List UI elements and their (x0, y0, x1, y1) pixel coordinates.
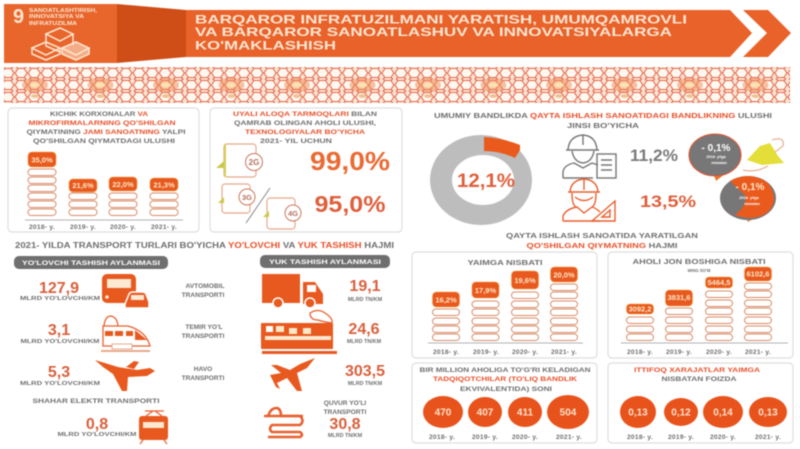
panel: share of GDP (412, 252, 597, 358)
capsule bar chart: 2019- y. (473, 349, 499, 356)
bubble chart: 504 (560, 408, 577, 418)
ornamental band (4, 67, 790, 103)
bubble chart: 0,12 (671, 408, 691, 418)
heading: UMUMIY BANDLIKDA QAYTA ISHLASH SANOATIDAGI BANDLIKNING ULUSHI (434, 111, 772, 120)
stat: 95,0%: 95,0% (314, 191, 386, 217)
heading (434, 111, 772, 130)
capsule bar chart: 3831,6 (668, 293, 690, 302)
bubble chart: 2020- y. (512, 434, 538, 441)
capsule bar chart: 2018- y. (29, 224, 55, 231)
capsule bar chart: 5464,5 (708, 278, 730, 287)
stat: rail freight: 24,6 (348, 321, 380, 338)
panel: mobile coverage (210, 108, 402, 232)
title: BARQAROR INFRATUZILMANI YARATISH, UMUMQAMROVLI (195, 14, 687, 26)
callout: male change: - 0,1% (702, 143, 731, 154)
icon: airplane (95, 360, 155, 391)
stat: air passengers: MLRD YO'LOVCHI/KM (20, 381, 101, 387)
goal 9 square: INNOVATSIYA VA (29, 14, 84, 20)
icon: 4G phone: 4G (288, 209, 298, 218)
capsule bar chart: 2019- y. (666, 349, 692, 356)
stat: rail passengers: 3,1 (48, 322, 70, 339)
panel heading (26, 111, 186, 145)
donut chart (430, 135, 532, 225)
stat: pipeline: 30,8 (329, 416, 361, 433)
callout: female change (720, 176, 776, 222)
capsule bar chart: 22,0% (112, 180, 134, 189)
heading: manufacturing value added (506, 231, 698, 250)
stat: air passengers (20, 364, 101, 387)
capsule bar chart: 2021- y. (151, 224, 177, 231)
capsule bar chart: 2020- y. (706, 349, 732, 356)
icon: high-speed train (101, 316, 150, 352)
stat: rail freight: MLRD TN/KM (347, 339, 382, 345)
panel heading: BIR MILLION AHOLIGA TO'G'RI KELADIGAN (420, 367, 591, 374)
stat: pipeline: MLRD TN/KM (328, 433, 363, 439)
unit label: MING SO'M (688, 268, 711, 273)
heading: JINSI BO'YICHA (567, 121, 640, 130)
icon: 3G phone: 3G (242, 193, 252, 202)
icon: cubes (32, 28, 89, 60)
bubble chart: 0,13 (628, 408, 648, 418)
icon: cargo plane (270, 358, 315, 391)
chevron arrow (743, 10, 791, 57)
icon: 3G phone (218, 184, 255, 213)
capsule bar chart (25, 152, 183, 231)
stat: female share: 13,5% (640, 192, 696, 211)
panel heading: NISBATAN FOIZDA (662, 376, 737, 383)
capsule bar chart (428, 267, 583, 356)
icon: pipeline (264, 408, 303, 437)
divider slash (246, 188, 270, 223)
stat: bus passengers: 127,9 (39, 280, 79, 297)
label: rail transport (182, 324, 225, 340)
bubble chart: 411 (517, 408, 534, 418)
callout: female change: - 0,1% (736, 182, 765, 193)
panel heading: 2021- YIL UCHUN (260, 138, 333, 145)
goal 9 square: INFRATUZILMA (29, 21, 77, 27)
label: pipeline transport: QUVUR YO'LI (324, 400, 366, 407)
callout: male change: nisbatan (711, 161, 727, 165)
passenger pill: YO'LOVCHI TASHISH AYLANMASI (22, 260, 160, 267)
stat: air freight: 303,5 (345, 363, 385, 380)
callout: male change: 2018- yilga (706, 155, 727, 159)
stat: urban electric (58, 416, 137, 438)
bubble chart: 2019- y. (668, 434, 694, 441)
panel heading: KICHIK KORXONALAR VA (50, 111, 148, 118)
stat: road freight (348, 278, 383, 303)
stat: rail freight (347, 321, 382, 345)
label: rail transport: TEMIR YO'L (185, 324, 223, 331)
icon: 2G phone (216, 144, 262, 177)
label: road transport: AVTOMOBIL (186, 283, 224, 290)
freight pill: YUK TASHISH AYLANMASI (269, 259, 381, 266)
capsule bar chart: 2020- y. (512, 349, 538, 356)
label: road transport: TRANSPORTI (182, 292, 225, 299)
panel: employment share (430, 111, 784, 225)
bubble chart (423, 395, 589, 441)
capsule bar chart: 2020- y. (110, 224, 136, 231)
capsule bar chart: 2018- y. (627, 349, 653, 356)
panel heading: EKVIVALENTIDA) SONI (460, 386, 552, 393)
capsule bar chart: 3092,2 (629, 304, 651, 314)
banner fold (117, 4, 186, 63)
panel heading: QAMRAB OLINGAN AHOLI ULUSHI, (234, 120, 376, 127)
stat: bus passengers: MLRD YO'LOVCHI/KM (20, 296, 101, 302)
callout: female change: 2018- yilga (739, 196, 760, 200)
bubble chart: 0,14 (713, 408, 733, 418)
stat: air passengers: 5,3 (48, 364, 70, 381)
capsule bar chart: 2021- y. (551, 349, 577, 356)
callout: female change: nisbatan (744, 202, 760, 206)
callout: male change (689, 134, 741, 181)
panel heading: AHOLI JON BOSHIGA NISBATI (632, 259, 766, 266)
panel heading: TADQIQOTCHILAR (TO'LIQ BANDLIK (433, 376, 577, 383)
title (195, 14, 687, 52)
bubble chart: 2018- y. (627, 434, 653, 441)
label: urban electric transport: SHAHAR ELEKTR TRANSPORTI (32, 398, 160, 405)
capsule bar chart (621, 267, 788, 356)
stat: bus passengers (20, 280, 101, 302)
capsule bar chart: 21,3% (153, 180, 175, 190)
label: air transport: TRANSPORTI (182, 375, 225, 382)
panel heading: YAIMGA NISBATI (468, 260, 543, 267)
goal number: 9 (13, 6, 24, 28)
panel heading (420, 367, 591, 393)
panel heading: ITTIFOQ XARAJATLAR YAIMGA (634, 367, 760, 374)
stat: rail passengers: MLRD YO'LOVCHI/KM (20, 339, 100, 345)
title: VA BARQAROR SANOATLASHUV VA INNOVATSIYALARGA (195, 27, 672, 39)
capsule bar chart: 2021- y. (745, 349, 771, 356)
label: air transport: HAVO (194, 366, 212, 373)
bubble chart: 2020- y. (710, 434, 736, 441)
capsule bar chart: 2019- y. (70, 224, 96, 231)
stat: urban electric: MLRD YO'LOVCHI/KM (58, 432, 137, 438)
bubble chart: 2021- y. (755, 434, 781, 441)
section heading: 2021- YILDA TRANSPORT TURLARI BO'YICHA YO'LOVCHI VA YUK TASHISH HAJMI (15, 241, 394, 250)
bubble chart: 2021- y. (556, 434, 582, 441)
stat: road freight: MLRD TN/KM (348, 297, 383, 303)
donut chart: 12,1% (457, 171, 515, 192)
heading: manufacturing value added: QAYTA ISHLASH SANOATIDA YARATILGAN (506, 231, 698, 240)
passenger pill (14, 256, 168, 269)
capsule bar chart: 6102,6 (747, 270, 769, 278)
bubble chart: 0,13 (758, 408, 778, 418)
icon: truck (262, 274, 323, 308)
panel heading (634, 367, 760, 383)
panel: transport volumes (14, 241, 394, 444)
panel heading: MIKROFIRMALARNING QO'SHILGAN (28, 120, 176, 127)
panel heading (233, 111, 377, 145)
panel: researchers per million (412, 363, 597, 443)
bubble chart: 2019- y. (472, 434, 498, 441)
capsule bar chart: 17,9% (475, 286, 496, 295)
header banner (4, 4, 791, 63)
icon: bus and car (102, 274, 149, 308)
title ribbon (186, 10, 752, 57)
bubble chart (620, 396, 787, 441)
title: KO'MAKLASHISH (195, 40, 336, 52)
heading: manufacturing value added: QO'SHILGAN QIYMATNING HAJMI (526, 241, 678, 250)
capsule bar chart: 2018- y. (433, 349, 459, 356)
icon: tram (139, 411, 168, 444)
capsule bar chart: 16,2% (435, 296, 457, 304)
goal name: SANOATLASHTIRISH, (29, 8, 98, 14)
capsule bar chart: 20,0% (553, 270, 575, 280)
label: road transport (182, 283, 225, 299)
label: rail transport: TRANSPORTI (182, 333, 225, 340)
bubble chart: 2018- y. (429, 434, 455, 441)
panel: R&D spending (608, 363, 793, 443)
freight pill (260, 255, 390, 268)
label: pipeline transport: TRANSPORTI (324, 409, 367, 416)
capsule bar chart: 19,6% (514, 276, 536, 285)
panel heading: TEXNOLOGIYALAR BO'YICHA (245, 129, 365, 136)
capsule bar chart: 21,6% (72, 181, 94, 190)
label: air transport (182, 366, 225, 382)
stat: rail passengers (20, 322, 100, 345)
stat: road freight: 19,1 (349, 278, 381, 295)
icon: hand with helmet (743, 139, 784, 171)
icon: female worker (563, 179, 615, 221)
goal 9 square (4, 4, 117, 63)
bubble chart: 470 (435, 408, 452, 418)
bubble chart: 407 (477, 408, 494, 418)
stat: 99,0%: 99,0% (310, 146, 390, 176)
panel heading: UYALI ALOQA TARMOQLARI BILAN (233, 111, 377, 118)
capsule bar chart: 35,0% (31, 156, 53, 164)
panel heading: QIYMATINING JAMI SANOATNING YALPI (26, 129, 186, 136)
icon: male worker (563, 135, 616, 178)
panel heading: QO'SHILGAN QIYMATDAGI ULUSHI (33, 138, 175, 145)
label: pipeline transport (324, 400, 367, 416)
panel: small business share (8, 108, 199, 232)
panel: per capita (608, 252, 793, 358)
icon: cargo ship (261, 310, 337, 354)
stat: urban electric: 0,8 (86, 416, 108, 433)
stat: air freight: MLRD TN/KM (348, 381, 383, 387)
stat: pipeline (328, 416, 363, 439)
icon: 2G phone: 2G (249, 158, 259, 167)
icon: 4G phone (263, 198, 301, 229)
stat: male share: 11,2% (630, 146, 678, 165)
